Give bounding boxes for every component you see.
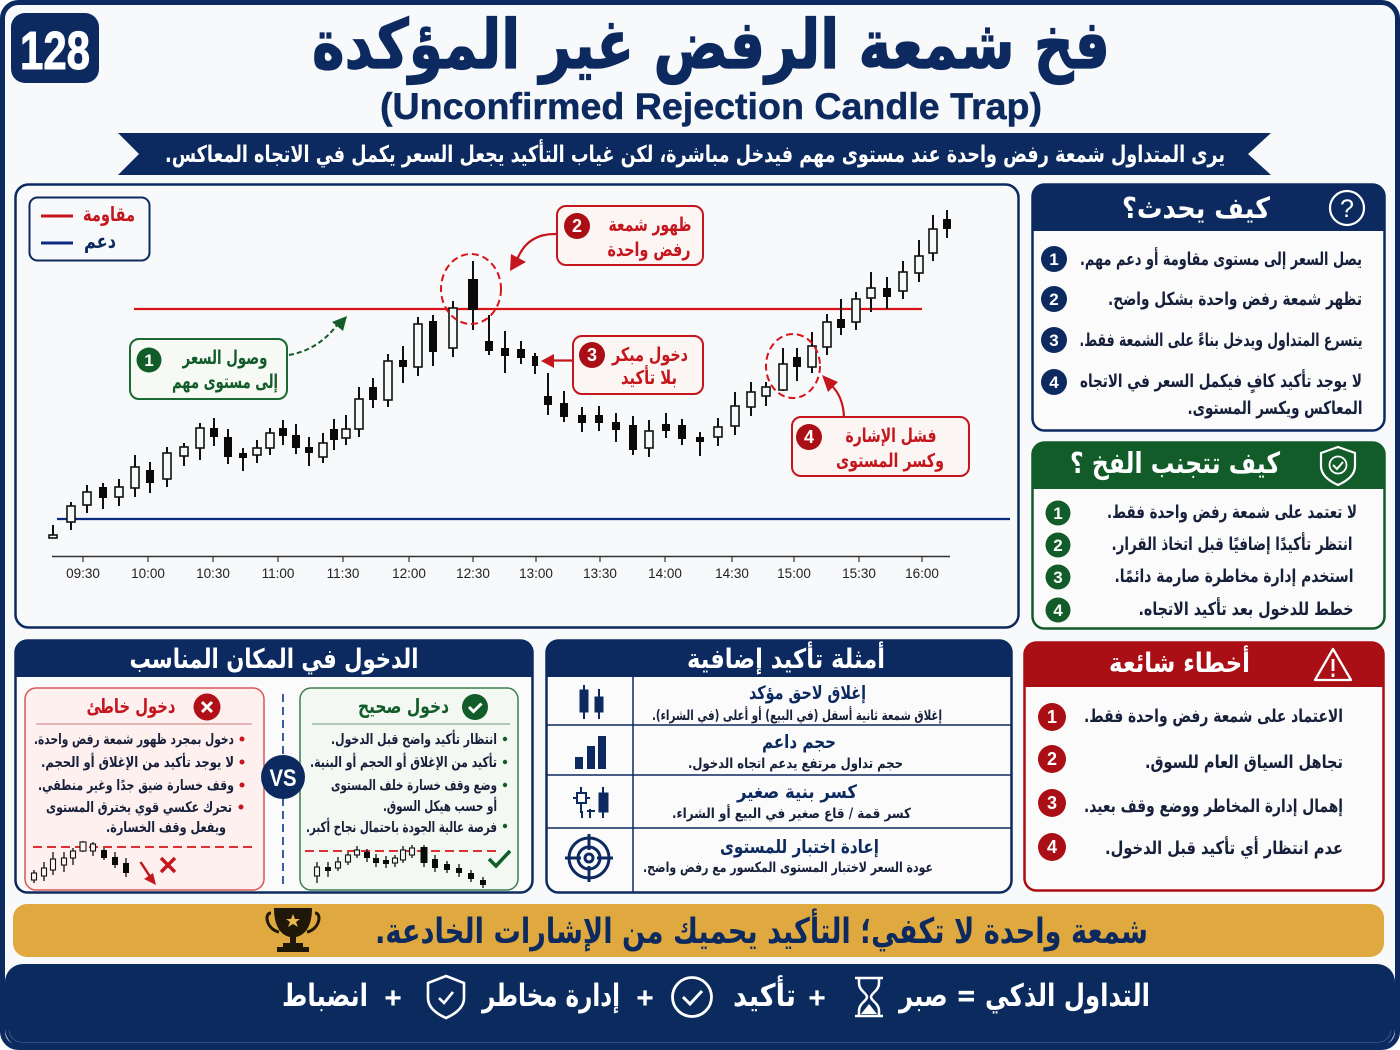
mistakes list: 1 — [1047, 707, 1057, 727]
callout 1: price reaches level: وصول السعر — [182, 347, 268, 369]
icon: question mark — [1330, 191, 1364, 225]
callout 1: price reaches level: إلى مستوى مهم — [172, 371, 278, 393]
time axis — [52, 556, 950, 581]
steps list: 1 — [1049, 250, 1059, 269]
callout 4: signal fails: وكسر المستوى — [836, 450, 944, 472]
correct entry card: وضع وقف خسارة خلف المستوى — [331, 778, 497, 794]
ribbon: summary sentence — [118, 133, 1271, 175]
badge: number 128 — [11, 13, 99, 83]
tips list: 3 — [1053, 568, 1063, 587]
heading: أخطاء شائعة — [1109, 645, 1250, 679]
highlight: rejection candle circle — [441, 254, 501, 324]
arrow: callout 4 to circle — [822, 375, 844, 417]
row: level retest: عودة السعر لاختبار المستوى المكسور مع رفض واضح. — [643, 860, 933, 876]
row: minor structure break: كسر بنية صغير — [736, 782, 857, 803]
panel: enter at the right place — [15, 640, 533, 892]
time axis: 12:30 — [456, 566, 490, 581]
time axis: 10:30 — [196, 566, 230, 581]
steps list — [1041, 246, 1362, 419]
icon: shield check — [428, 976, 464, 1018]
wrong entry card: تحرك عكسي قوي يخترق المستوى — [46, 800, 232, 817]
time axis: 14:00 — [648, 566, 682, 581]
row: level retest — [565, 834, 933, 882]
wrong entry card: لا يوجد تأكيد من الإغلاق أو الحجم. — [41, 753, 234, 771]
correct entry card: فرصة عالية الجودة باحتمال نجاح أكبر. — [306, 818, 497, 836]
time axis: 09:30 — [66, 566, 100, 581]
wrong entry card: ويفعل وقف الخسارة. — [106, 820, 226, 836]
legend — [30, 198, 150, 260]
time axis: 11:30 — [327, 566, 359, 581]
bottom formula banner: + — [636, 982, 654, 1015]
tips list: 1 — [1053, 504, 1063, 523]
wrong entry card — [25, 688, 264, 890]
heading: كيف تتجنب الفخ ؟ — [1070, 446, 1280, 480]
icon: hourglass — [855, 978, 883, 1016]
callout 4: signal fails — [792, 417, 969, 476]
time axis: 12:00 — [392, 566, 426, 581]
mini chart: failed entry — [32, 841, 255, 885]
legend: مقاومة — [83, 202, 135, 226]
bottom formula banner: إدارة مخاطر — [481, 978, 620, 1014]
panel: how it happens — [1032, 184, 1385, 430]
row: minor structure break: كسر قمة / قاع صغير في البيع أو الشراء. — [672, 804, 912, 822]
highlight: failed signal circle — [766, 334, 820, 398]
candlesticks — [49, 210, 951, 538]
gold takeaway bar: شمعة واحدة لا تكفي؛ التأكيد يحميك من الإشارات الخادعة. — [375, 908, 1148, 952]
tips list — [1046, 500, 1357, 622]
icon: question mark: ? — [1340, 195, 1354, 223]
mistakes list: تجاهل السياق العام للسوق. — [1145, 752, 1343, 773]
correct entry card: تأكيد من الإغلاق أو الحجم أو البنية. — [310, 753, 497, 771]
mistakes list: 3 — [1047, 793, 1057, 813]
row: level retest: إعادة اختبار للمستوى — [720, 837, 879, 858]
panel: common mistakes — [1024, 642, 1384, 890]
time axis: 15:30 — [842, 566, 876, 581]
steps list: 4 — [1049, 373, 1059, 392]
panel: extra confirmation examples — [546, 640, 1012, 892]
icon: target — [565, 834, 613, 882]
mini chart: confirmed entry — [305, 845, 510, 888]
steps list: 2 — [1049, 290, 1059, 309]
callout 1: price reaches level: 1 — [144, 351, 154, 370]
icon: shield check — [1321, 447, 1355, 485]
resistance line — [134, 308, 922, 310]
panel: candlestick chart — [16, 184, 1018, 628]
arrow: callout 3 to candle — [541, 354, 573, 368]
gold takeaway bar — [13, 904, 1384, 957]
subtitle: (Unconfirmed Rejection Candle Trap) — [380, 86, 1042, 127]
VS divider — [261, 694, 305, 888]
callout 3: early entry — [573, 336, 703, 394]
time axis: 10:00 — [131, 566, 165, 581]
support line — [57, 518, 1010, 520]
panel: how to avoid the trap — [1032, 442, 1385, 628]
icon: structure candles — [573, 787, 608, 818]
callout 2: single rejection candle: رفض واحدة — [608, 239, 690, 261]
row: minor structure break — [573, 782, 912, 822]
mistakes list: 2 — [1047, 749, 1057, 769]
time axis: 16:00 — [905, 566, 939, 581]
bottom formula banner: انضباط — [282, 978, 368, 1014]
row: supporting volume: حجم داعم — [762, 732, 836, 753]
time axis: 11:00 — [262, 566, 294, 581]
mistakes list: عدم انتظار أي تأكيد قبل الدخول. — [1105, 836, 1343, 859]
bottom formula banner: + — [808, 982, 826, 1015]
time axis: 13:30 — [583, 566, 617, 581]
bottom formula banner: + — [384, 982, 402, 1015]
callout 2: single rejection candle: 2 — [572, 216, 582, 236]
correct entry card: أو حسب هيكل السوق. — [383, 797, 497, 815]
heading: الدخول في المكان المناسب — [130, 644, 418, 675]
time axis: 15:00 — [777, 566, 811, 581]
heading: أمثلة تأكيد إضافية — [687, 641, 885, 675]
icon: volume bars — [575, 736, 606, 769]
icon: two candles — [580, 685, 603, 719]
arrow: callout 2 to candle — [510, 234, 557, 271]
row: supporting volume: حجم تداول مرتفع يدعم اتجاه الدخول. — [688, 756, 903, 772]
row: confirmed close — [580, 683, 942, 724]
bottom formula banner: تأكيد — [733, 975, 796, 1014]
time axis: 13:00 — [519, 566, 553, 581]
arrow: callout 1 to level — [289, 316, 347, 355]
VS divider: VS — [270, 765, 296, 792]
correct entry card: انتظار تأكيد واضح قبل الدخول. — [331, 730, 497, 748]
callout 4: signal fails: 4 — [804, 427, 814, 447]
legend: دعم — [84, 229, 116, 253]
mistakes list — [1038, 703, 1343, 861]
row: confirmed close: إغلاق لاحق مؤكد — [749, 683, 866, 704]
callout 2: single rejection candle — [557, 206, 703, 265]
wrong entry card: دخول خاطئ — [86, 694, 176, 718]
steps list: 3 — [1049, 331, 1059, 350]
tips list: 4 — [1053, 601, 1063, 620]
bottom formula banner: التداول الذكي = صبر — [897, 978, 1150, 1014]
correct entry card — [300, 688, 518, 890]
icon: warning triangle — [1315, 649, 1351, 680]
callout 1: price reaches level — [130, 339, 287, 399]
wrong entry card: دخول بمجرد ظهور شمعة رفض واحدة. — [34, 732, 234, 748]
icon: check circle — [672, 978, 712, 1016]
title: فخ شمعة الرفض غير المؤكدة — [312, 6, 1110, 85]
callout 2: single rejection candle: ظهور شمعة — [608, 214, 692, 236]
row: supporting volume — [575, 732, 903, 772]
time axis: 14:30 — [715, 566, 749, 581]
callout 4: signal fails: فشل الإشارة — [846, 425, 936, 447]
callout 3: early entry: 3 — [587, 345, 597, 365]
heading: كيف يحدث؟ — [1122, 191, 1270, 225]
callout 3: early entry: بلا تأكيد — [621, 365, 677, 389]
icon: trophy — [267, 908, 319, 952]
bottom formula banner — [5, 964, 1395, 1047]
correct entry card: دخول صحيح — [358, 694, 449, 718]
mistakes list: 4 — [1047, 837, 1057, 857]
wrong entry card: وقف خسارة ضيق جدًا وغير منطقي. — [38, 778, 234, 794]
badge: number 128: 128 — [20, 21, 90, 81]
callout 3: early entry: دخول مبكر — [611, 344, 688, 366]
tips list: 2 — [1053, 536, 1063, 555]
row: confirmed close: إغلاق شمعة ثانية أسفل (في البيع) أو أعلى (في الشراء). — [652, 706, 942, 724]
